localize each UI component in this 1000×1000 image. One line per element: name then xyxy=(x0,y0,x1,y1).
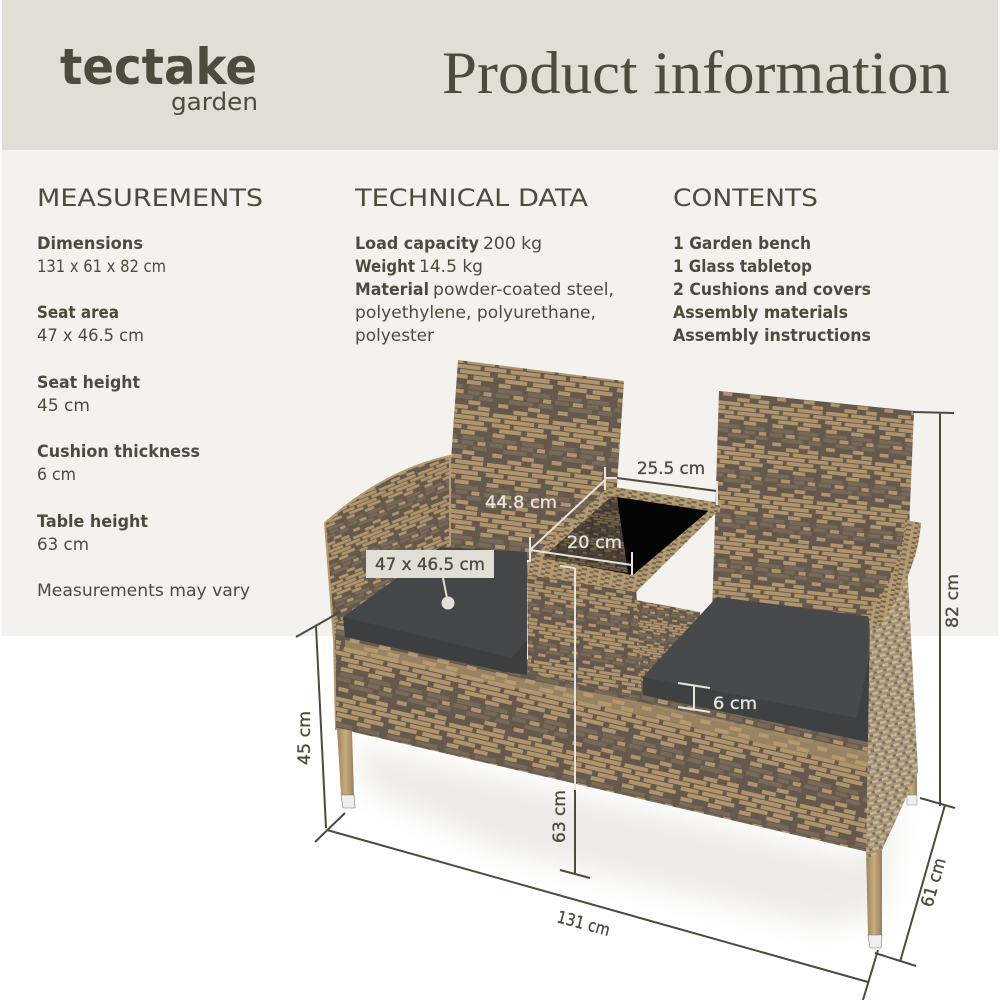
callout: 47 x 46.5 cm seat area xyxy=(366,550,494,610)
column: measurements: MEASUREMENTS xyxy=(37,184,263,212)
right armrest xyxy=(866,520,921,860)
column: technical data: 200 kg xyxy=(483,234,542,254)
column: measurements: Table height xyxy=(37,512,148,532)
dimension: 44.8 cm xyxy=(485,467,617,562)
front rail xyxy=(345,640,868,768)
right backrest xyxy=(712,391,914,625)
column: technical data: polyester xyxy=(355,326,434,346)
column: technical data xyxy=(354,184,614,346)
column: measurements: 47 x 46.5 cm xyxy=(37,326,144,346)
dimension: 131 cm: 131 cm xyxy=(555,908,612,941)
dimension: 45 cm: 45 cm xyxy=(295,711,315,765)
column: measurements: 45 cm xyxy=(37,396,90,416)
column: technical data: polyethylene, polyurethane, xyxy=(355,303,596,323)
column: contents: Assembly instructions xyxy=(673,326,871,346)
logo: tectake garden: garden xyxy=(171,88,258,116)
right front leg xyxy=(866,848,882,948)
column: contents: 2 Cushions and covers xyxy=(673,280,871,300)
dimension: 63 cm xyxy=(550,566,590,878)
rear right leg xyxy=(906,755,917,805)
dimension: 82 cm xyxy=(913,412,963,808)
column: technical data: Weight xyxy=(355,257,415,277)
column: measurements: 6 cm xyxy=(37,465,76,485)
column: technical data: 14.5 kg xyxy=(419,257,483,277)
dimension: 61 cm: 61 cm xyxy=(918,856,951,909)
dimension: 61 cm xyxy=(875,805,951,966)
dimension: 20 cm xyxy=(530,533,632,575)
left leg xyxy=(337,728,355,808)
column: contents xyxy=(673,184,871,346)
callout: 47 x 46.5 cm seat area: 47 x 46.5 cm xyxy=(375,555,485,575)
column: measurements: Seat area xyxy=(37,303,119,323)
tabletop rim xyxy=(527,486,722,592)
column: measurements: Cushion thickness xyxy=(37,442,200,462)
logo: tectake garden: tectake xyxy=(60,38,257,96)
left armrest xyxy=(325,456,450,730)
column: contents: 1 Glass tabletop xyxy=(673,257,812,277)
column: measurements: 63 cm xyxy=(37,535,89,555)
dimension: 131 cm xyxy=(315,813,878,1000)
column: measurements: Dimensions xyxy=(37,234,143,254)
column: measurements xyxy=(37,184,263,601)
column: measurements: Measurements may vary xyxy=(37,581,250,601)
dimension: 6 cm: 6 cm xyxy=(713,694,757,714)
dimension: 82 cm: 82 cm xyxy=(943,574,963,628)
title: Product information xyxy=(442,40,950,106)
header band xyxy=(2,0,998,150)
column: contents: CONTENTS xyxy=(673,184,818,212)
column: technical data: powder-coated steel, xyxy=(433,280,614,300)
dimension: 63 cm: 63 cm xyxy=(550,790,570,843)
column: contents: Assembly materials xyxy=(673,303,848,323)
information panel background xyxy=(2,150,998,636)
front body xyxy=(336,622,868,852)
column: contents: 1 Garden bench xyxy=(673,234,811,254)
dimension: 25.5 cm xyxy=(617,459,717,505)
column: measurements: 131 x 61 x 82 cm xyxy=(37,257,166,277)
bench illustration xyxy=(325,360,921,948)
left backrest xyxy=(440,360,624,560)
table column xyxy=(527,565,642,699)
right cushion xyxy=(643,597,872,742)
left cushion xyxy=(343,547,527,675)
dimension: 44.8 cm: 44.8 cm xyxy=(485,493,557,513)
glass tabletop xyxy=(538,494,710,576)
dimension: 25.5 cm: 25.5 cm xyxy=(637,459,705,479)
dimension: 20 cm: 20 cm xyxy=(567,533,622,553)
dimension: 6 cm xyxy=(678,683,757,714)
column: technical data: TECHNICAL DATA xyxy=(354,184,589,212)
ground shadow xyxy=(350,745,900,925)
rear rail between seats xyxy=(636,600,700,690)
column: measurements: Seat height xyxy=(37,373,140,393)
dimension: 45 cm xyxy=(295,612,340,828)
column: technical data: Load capacity xyxy=(355,234,479,254)
column: technical data: Material xyxy=(355,280,429,300)
